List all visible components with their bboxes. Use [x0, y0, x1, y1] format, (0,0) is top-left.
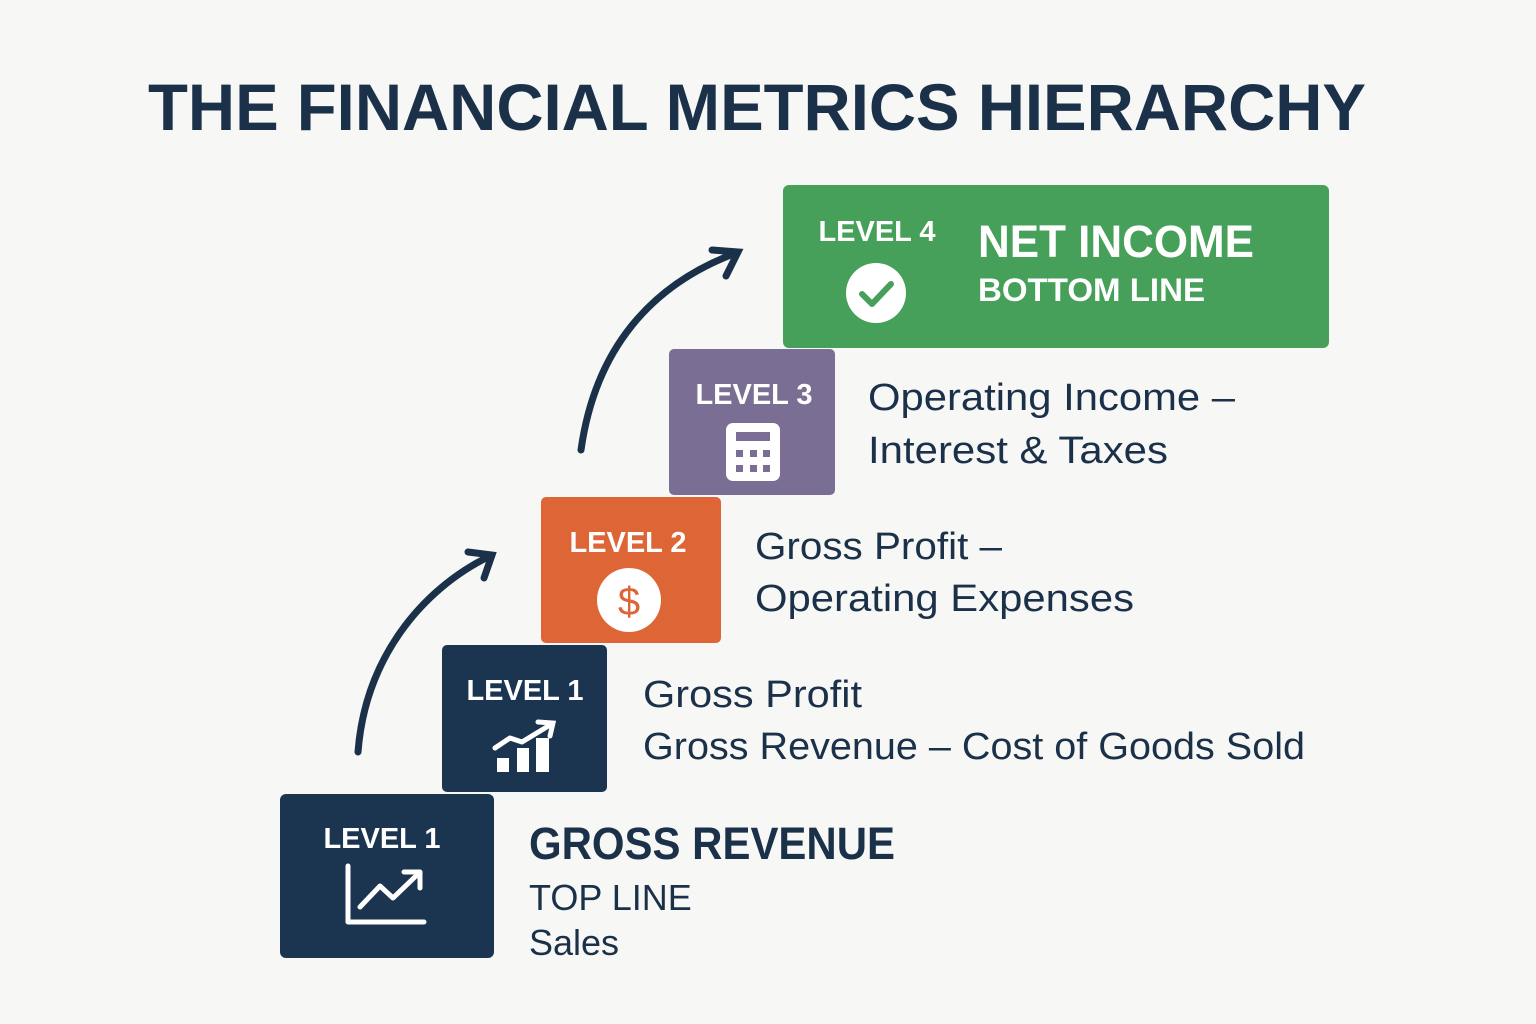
- panel: level 3: [669, 349, 835, 495]
- icon: dollar: $: [618, 580, 640, 624]
- arrow: upper curved arrow: [581, 250, 738, 450]
- level 3 label: LEVEL 3: [695, 379, 813, 411]
- text: level 2 description: Gross Profit –: [755, 526, 1003, 568]
- text: level 1 gross profit: [643, 674, 1305, 768]
- icon: check circle: [846, 263, 906, 323]
- text: level 2 description: [755, 526, 1134, 620]
- text: level 3 description: Interest & Taxes: [868, 430, 1168, 472]
- level 4 label: LEVEL 4: [818, 216, 936, 248]
- level 1 label: LEVEL 1: [323, 823, 441, 855]
- text: level 3 description: Operating Income –: [868, 377, 1236, 419]
- panel: level 1 lower: [280, 794, 494, 958]
- text: level 3 description: [868, 377, 1236, 472]
- text: gross revenue: [529, 818, 895, 963]
- text: level 1 gross profit: Gross Revenue – Cost of Goods Sold: [643, 726, 1305, 768]
- arrow: lower curved arrow: [358, 552, 492, 752]
- heading: net income: NET INCOME: [978, 216, 1254, 267]
- text: level 2 description: Operating Expenses: [755, 578, 1134, 620]
- text: level 1 gross profit: Gross Profit: [643, 674, 862, 716]
- icon: dollar: [597, 568, 661, 632]
- subheading: bottom line: BOTTOM LINE: [978, 272, 1205, 308]
- panel: level 2: [541, 497, 721, 643]
- level 1 label: LEVEL 1: [466, 675, 584, 707]
- level 2 label: LEVEL 2: [569, 527, 687, 559]
- text: gross revenue: TOP LINE: [529, 877, 692, 918]
- text: gross revenue: Sales: [529, 922, 619, 963]
- icon: line chart: [348, 866, 424, 922]
- icon: calculator: [726, 423, 780, 481]
- icon: bar chart with arrow: [495, 722, 553, 772]
- panel: level 1 upper: [442, 645, 607, 792]
- text: gross revenue: GROSS REVENUE: [529, 818, 895, 869]
- panel: level 4 net income: [783, 185, 1329, 348]
- title: THE FINANCIAL METRICS HIERARCHY: [148, 70, 1366, 144]
